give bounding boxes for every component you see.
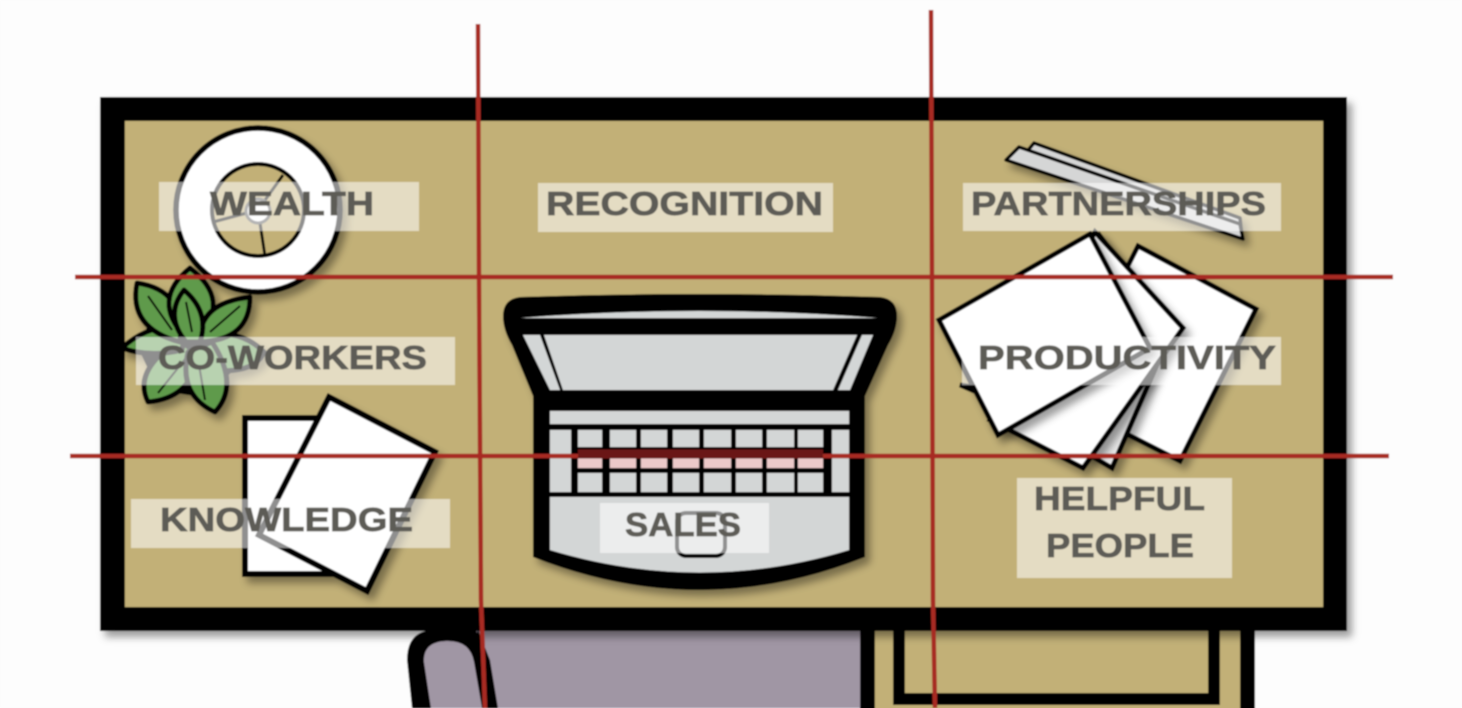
label: KNOWLEDGE: [131, 499, 450, 548]
label: HELPFUL PEOPLE: PEOPLE: [1046, 527, 1194, 564]
label: CO-WORKERS: CO-WORKERS: [158, 339, 427, 376]
label: SALES: SALES: [625, 506, 741, 543]
icon: sheets of paper: [245, 397, 435, 591]
label: SALES: [600, 503, 769, 553]
icon: plate: [176, 128, 340, 292]
label: PRODUCTIVITY: PRODUCTIVITY: [978, 339, 1276, 376]
icon: plant: [122, 268, 264, 412]
label: WEALTH: WEALTH: [210, 185, 374, 222]
desk drawer unit: [860, 625, 1255, 708]
label: PARTNERSHIPS: PARTNERSHIPS: [971, 185, 1266, 222]
label: PRODUCTIVITY: [962, 337, 1281, 385]
label: HELPFUL PEOPLE: HELPFUL: [1034, 480, 1205, 517]
office chair: [407, 630, 860, 708]
icon: pen: [1006, 143, 1243, 239]
label: KNOWLEDGE: KNOWLEDGE: [160, 501, 413, 538]
label: CO-WORKERS: [136, 337, 455, 385]
label: RECOGNITION: RECOGNITION: [546, 185, 823, 222]
label: WEALTH: [159, 182, 419, 231]
label: HELPFUL PEOPLE: [1017, 478, 1232, 578]
label: PARTNERSHIPS: [963, 183, 1281, 231]
icon: scattered papers: [939, 232, 1256, 468]
desk top: [100, 97, 1347, 631]
icon: laptop: [503, 294, 897, 590]
label: RECOGNITION: [538, 183, 833, 232]
